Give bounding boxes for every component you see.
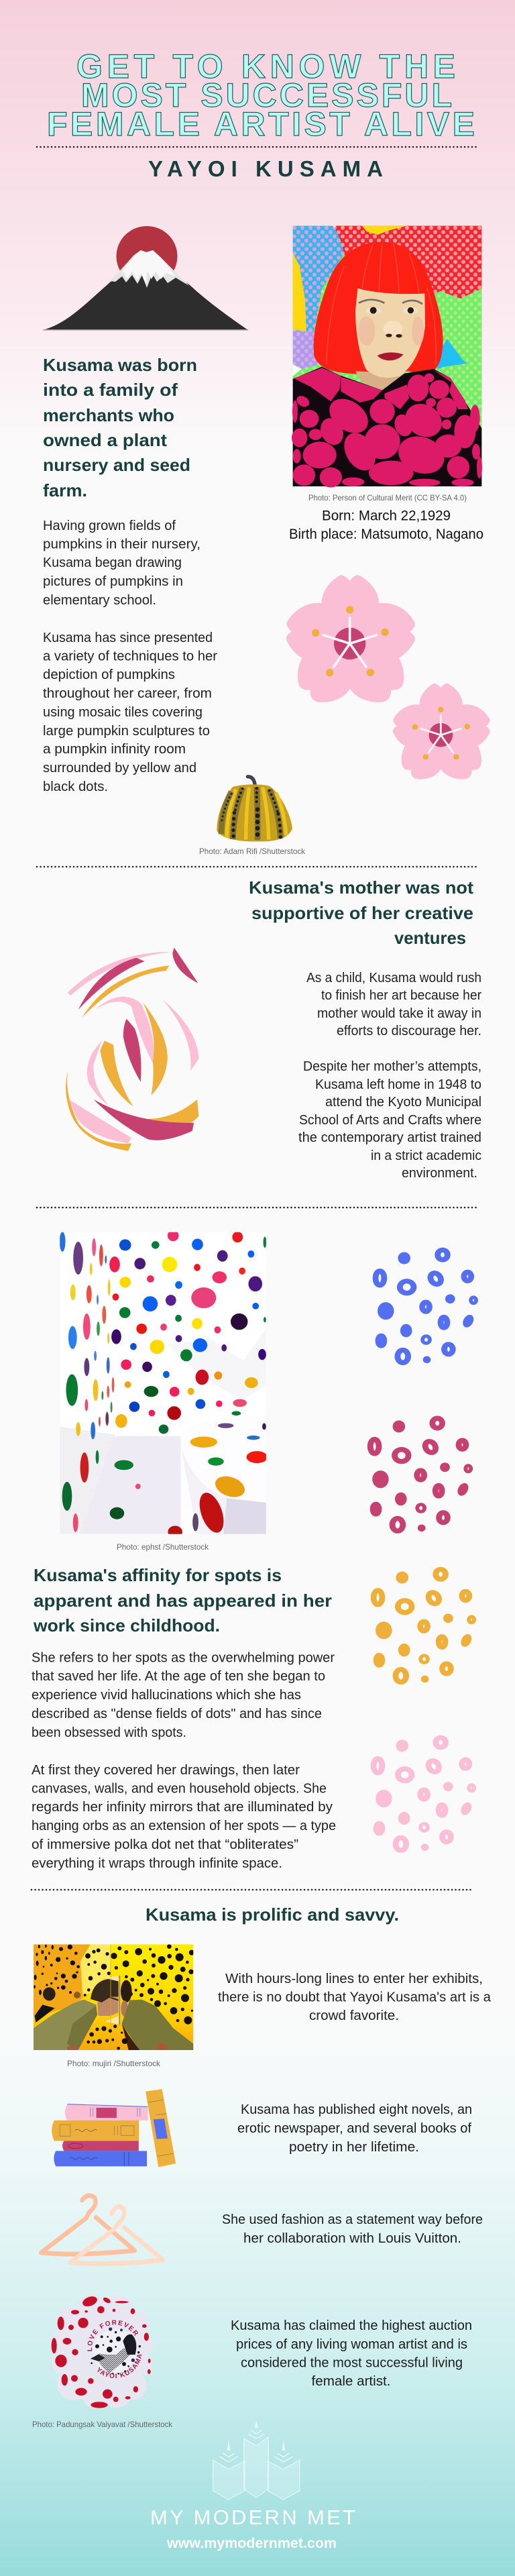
text block: spots saved her life: been obsessed with spots. — [32, 1725, 186, 1740]
heading: mother not supportive: ventures — [394, 928, 466, 948]
caption: pumpkin art photo credit: Photo: Padungsak Vaiyavat /Shutterstock — [32, 2420, 173, 2429]
text block: spots saved her life: She refers to her spots as the overwhelming power — [32, 1650, 335, 1665]
text block: fashion statement: her collaboration with Louis Vuitton. — [243, 2231, 461, 2246]
icon: large cherry blossom — [286, 575, 415, 702]
icon: pink spots — [374, 1737, 474, 1851]
text block: fashion statement: She used fashion as a statement way before — [222, 2212, 483, 2227]
text block: infinity mirrors: regards her infinity mirrors that are illuminated by — [32, 1800, 333, 1815]
photo: portrait of Yayoi Kusama — [292, 226, 482, 488]
text block: pumpkins in nursery: pictures of pumpkins in — [43, 574, 183, 589]
illustration: swirling brush strokes — [66, 948, 198, 1151]
text block: pumpkins in nursery: pumpkins in their nursery, — [43, 537, 201, 551]
photo: Love Forever polka dot pumpkin — [51, 2294, 153, 2409]
heading: mother not supportive: supportive of her creative — [251, 903, 473, 923]
text block: rushing to finish art: mother would take it away in — [317, 1006, 481, 1021]
text block: infinity mirrors — [32, 1763, 336, 1871]
text block: pumpkins in nursery: Having grown fields of — [43, 519, 176, 533]
icon: stack of books — [52, 2089, 176, 2167]
text block: spots saved her life: experience vivid hallucinations which she has — [32, 1688, 301, 1703]
text block: leaving home for Kyoto: School of Arts and Crafts where — [299, 1113, 481, 1128]
text block: leaving home for Kyoto: in a strict academic — [371, 1148, 481, 1163]
text block: spots saved her life: that saved her life. At the age of ten she began to — [32, 1669, 325, 1684]
text block: novels and poetry: erotic newspaper, and several books of — [237, 2121, 471, 2136]
text block: infinity mirrors: of immersive polka dot net that “obliterates” — [32, 1837, 298, 1852]
text block: highest auction prices: prices of any living woman artist and is — [236, 2337, 467, 2352]
text block: novels and poetry — [237, 2102, 472, 2155]
text block: novels and poetry: Kusama has published eight novels, an — [241, 2102, 472, 2117]
icon: crimson spots — [370, 1418, 471, 1532]
text block: pumpkin techniques: using mosaic tiles covering — [43, 705, 203, 720]
text block: leaving home for Kyoto: Despite her mother’s attempts, — [303, 1059, 481, 1074]
heading: born into a family of merchants: nursery and seed — [43, 455, 190, 475]
text block: spots saved her life: described as "dense fields of dots" and has since — [32, 1707, 322, 1721]
text block: leaving home for Kyoto: environment. — [402, 1166, 477, 1181]
text block: crowd favorite: crowd favorite. — [309, 2008, 399, 2023]
caption: portrait photo credit: Photo: Person of Cultural Merit (CC BY-SA 4.0) — [308, 493, 467, 502]
text block: rushing to finish art — [306, 971, 481, 1038]
heading: born into a family of merchants — [43, 355, 197, 500]
caption: room photo credit: Photo: ephst /Shutterstock — [117, 1542, 209, 1552]
text block: crowd favorite: there is no doubt that Yayoi Kusama's art is a — [218, 1990, 492, 2004]
text block: infinity mirrors: hanging orbs as an extension of her spots — a type — [32, 1819, 336, 1833]
icon: blue spots — [376, 1250, 476, 1363]
text block: leaving home for Kyoto — [298, 1059, 481, 1181]
icon: small cherry blossom — [393, 684, 490, 780]
text block: pumpkin techniques: throughout her career, from — [43, 686, 212, 701]
text block: spots saved her life — [32, 1650, 335, 1740]
photo: Love Forever polka dot pumpkin: LOVE FOREVER — [87, 2320, 138, 2351]
title — [47, 48, 475, 143]
text block: rushing to finish art: As a child, Kusama would rush — [306, 971, 481, 985]
text block: pumpkin techniques: Kusama has since presented — [43, 631, 213, 645]
text block: highest auction prices: Kusama has claimed the highest auction — [231, 2318, 472, 2333]
icon: clothes hangers — [41, 2196, 163, 2264]
text block: pumpkin techniques: surrounded by yellow and — [43, 761, 196, 775]
birth facts: Birth place: Matsumoto, Nagano — [289, 527, 483, 542]
heading: affinity for spots: work since childhood. — [33, 1615, 220, 1635]
heading: born into a family of merchants: Kusama was born — [43, 355, 197, 375]
title: MOST SUCCESSFUL — [81, 76, 452, 114]
text block: pumpkins in nursery — [43, 519, 201, 608]
text block: leaving home for Kyoto: the contemporary artist trained — [298, 1130, 481, 1145]
icon: Mount Fuji with red sun — [43, 226, 248, 330]
birth facts — [289, 508, 483, 542]
text block: crowd favorite — [218, 1972, 492, 2023]
text block: rushing to finish art: efforts to discourage her. — [337, 1024, 481, 1038]
logo wordmark: MY MODERN MET — [150, 2506, 355, 2529]
text block: pumpkin techniques: large pumpkin sculptures to — [43, 724, 210, 739]
text block: pumpkin techniques: a pumpkin infinity room — [43, 742, 186, 757]
subtitle: Yayoi Kusama: YAYOI KUSAMA — [148, 156, 383, 181]
text block: fashion statement — [222, 2212, 483, 2246]
text block: highest auction prices: female artist. — [311, 2374, 390, 2389]
text block: infinity mirrors: At first they covered her drawings, then later — [32, 1763, 300, 1778]
text block: novels and poetry: poetry in her lifetime. — [289, 2140, 419, 2155]
photo: yellow polka dot pumpkin sculpture — [217, 777, 292, 841]
text block: pumpkins in nursery: Kusama began drawing — [43, 555, 182, 570]
photo: Love Forever polka dot pumpkin: YAYOI KUSAMA — [97, 2355, 142, 2379]
logo: My Modern Met buildings — [213, 2420, 300, 2500]
text block: pumpkins in nursery: elementary school. — [43, 593, 156, 608]
text block: pumpkin techniques: a variety of techniques to her — [43, 649, 217, 664]
title: GET TO KNOW THE — [76, 48, 455, 85]
icon: gold spots — [374, 1569, 474, 1682]
heading: born into a family of merchants: owned a plant — [43, 430, 167, 450]
website url: www.mymodernmet.com — [166, 2536, 337, 2551]
birth facts: Born: March 22,1929 — [322, 508, 451, 523]
text block: infinity mirrors: canvases, walls, and even household objects. She — [32, 1782, 327, 1796]
text block: crowd favorite: With hours-long lines to enter her exhibits, — [225, 1972, 483, 1986]
heading: prolific and savvy: Kusama is prolific and savvy. — [146, 1904, 399, 1925]
heading: born into a family of merchants: into a family of — [43, 380, 178, 400]
text block: pumpkin techniques: depiction of pumpkins — [43, 667, 175, 682]
heading: mother not supportive — [249, 877, 473, 948]
text block: highest auction prices: considered the most successful living — [241, 2356, 463, 2371]
text block: highest auction prices — [231, 2318, 472, 2389]
text block: infinity mirrors: everything it wraps through infinite space. — [32, 1856, 282, 1871]
heading: born into a family of merchants: merchants who — [43, 405, 174, 425]
photo: visitors in yellow polka dot room — [34, 1944, 194, 2051]
title: FEMALE ARTIST ALIVE — [47, 105, 475, 143]
text block: pumpkin techniques: black dots. — [43, 780, 108, 794]
text block: pumpkin techniques — [43, 631, 217, 794]
heading: affinity for spots: apparent and has appeared in her — [34, 1591, 332, 1611]
heading: affinity for spots: Kusama's affinity for spots is — [34, 1565, 282, 1585]
caption: pumpkin photo credit: Photo: Adam Rifi /Shutterstock — [199, 847, 306, 856]
text block: leaving home for Kyoto: attend the Kyoto Municipal — [325, 1095, 481, 1110]
text block: rushing to finish art: to finish her art because her — [321, 988, 481, 1003]
heading: affinity for spots — [33, 1565, 332, 1635]
text block: leaving home for Kyoto: Kusama left home in 1948 to — [315, 1077, 481, 1092]
heading: born into a family of merchants: farm. — [43, 480, 87, 500]
caption: yellow room photo credit: Photo: mujiri /Shutterstock — [67, 2059, 161, 2068]
photo: polka dot infinity room — [60, 1230, 268, 1538]
heading: mother not supportive: Kusama's mother was not — [249, 877, 473, 898]
